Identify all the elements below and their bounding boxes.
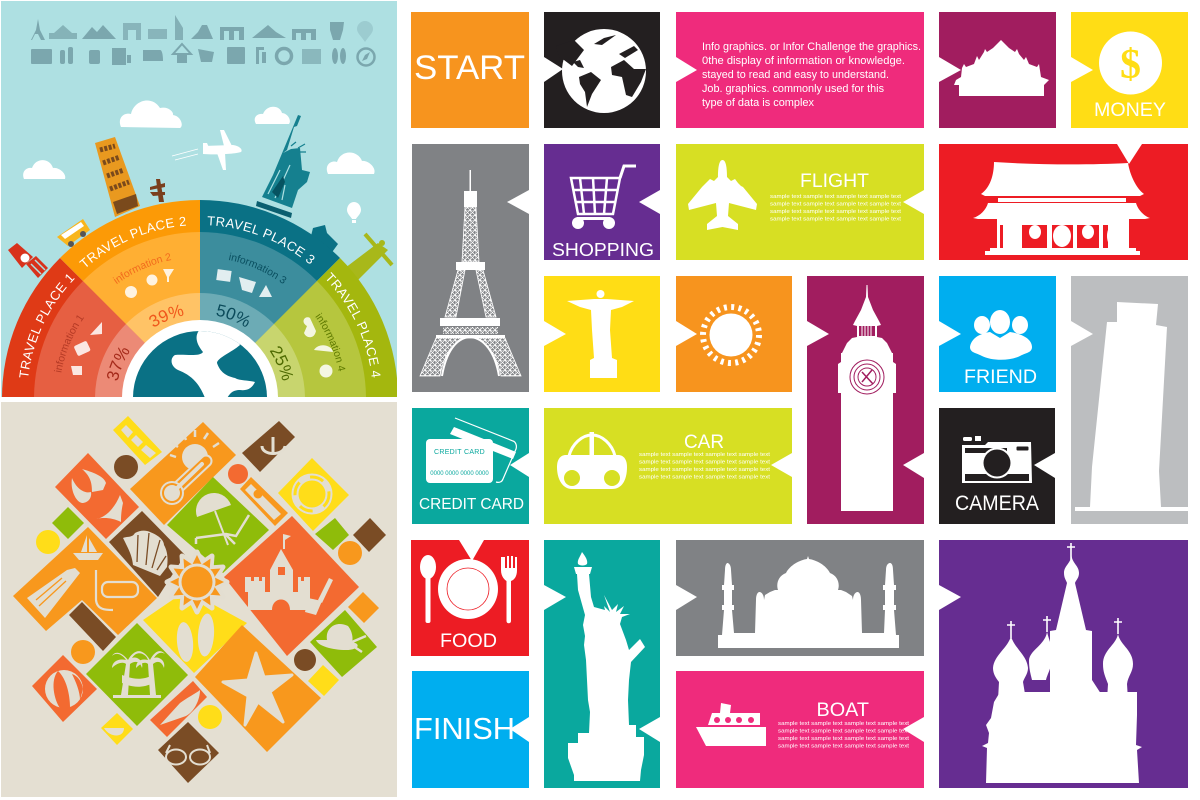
- tile: sandcastle: [224, 516, 359, 656]
- tile: credit card: CREDIT CARD: [419, 496, 524, 513]
- tile: flight: sample text sample text sample text sample text: [770, 209, 901, 215]
- sector percentages: 50%: [216, 304, 250, 327]
- tile: credit card: 0000 0000 0000 0000: [430, 471, 489, 477]
- tile: brown diamond: [353, 518, 386, 552]
- circle: yellow left: [36, 530, 60, 554]
- panel: travel places semicircle infographic: [1, 1, 397, 397]
- hot air balloon: [347, 202, 361, 223]
- tile: big ben: [807, 276, 924, 524]
- tile: sun: [676, 276, 792, 392]
- tile: intro text: [676, 12, 924, 128]
- tile: chinese temple: [939, 144, 1188, 260]
- tile: boat: sample text sample text sample text sample text: [778, 721, 909, 727]
- tile: flip flops: [143, 590, 247, 673]
- circle: brown right: [294, 649, 316, 671]
- Pisa tower: [95, 137, 140, 217]
- sector percentages: 37%: [107, 347, 130, 380]
- tile: intro text: Info graphics. or Infor Challenge the graphics.: [702, 41, 921, 53]
- tile: intro text: stayed to read and easy to understand.: [702, 69, 889, 81]
- sector percentages: [107, 304, 293, 380]
- tile: beach ball: [32, 655, 97, 722]
- tile: boat: sample text sample text sample text sample text: [778, 736, 909, 742]
- tile: finish: FINISH: [414, 711, 515, 746]
- sector titles: [19, 216, 380, 378]
- circle: orange right: [338, 541, 362, 565]
- tile: brown bar: [69, 602, 116, 651]
- tile: intro text: Job. graphics. commonly used for this: [702, 83, 884, 95]
- tile: statue of liberty: [544, 540, 660, 788]
- tile: boat: sample text sample text sample text sample text: [778, 728, 909, 734]
- clock tower: [8, 243, 48, 278]
- sector titles: TRAVEL PLACE 4: [326, 272, 380, 378]
- sector mini icons: [71, 269, 333, 378]
- tile: ice cream: [150, 681, 207, 737]
- tile: flight: [676, 144, 924, 260]
- tile: intro text: 0the display of information or knowledge.: [702, 55, 905, 67]
- circle: red: [228, 464, 248, 484]
- sector information labels: information 2: [112, 253, 172, 284]
- tile: start: START: [414, 49, 525, 87]
- tile: car: sample text sample text sample text sample text: [639, 474, 770, 480]
- christ statue: [345, 234, 392, 280]
- tile: christ the redeemer: [544, 276, 660, 392]
- sector information labels: information 1: [54, 316, 84, 372]
- tile: camera: CAMERA: [955, 492, 1039, 515]
- tile: lemon slice: [101, 713, 133, 745]
- tile: green small left: [52, 507, 84, 539]
- panel: beach icon collage: [1, 402, 397, 797]
- semicircle sectors: [2, 200, 398, 398]
- tile: sunglasses: [158, 722, 219, 783]
- icon row: landmarks: [31, 15, 373, 42]
- tile: boat: BOAT: [816, 699, 869, 721]
- tile: friend: FRIEND: [964, 366, 1037, 388]
- sector titles: TRAVEL PLACE 3: [208, 216, 314, 264]
- circle: brown: [114, 455, 138, 479]
- clouds: [23, 100, 375, 179]
- tile: flight: FLIGHT: [800, 170, 869, 192]
- bus: [57, 219, 90, 247]
- tile: car: [544, 408, 792, 524]
- tile: beach umbrella and lounger: [167, 477, 269, 573]
- tile: palms and hammock: [86, 623, 188, 726]
- plane and contrail: [172, 130, 242, 170]
- tile: anchor: [242, 421, 295, 472]
- tile: flight: sample text sample text sample text sample text: [770, 202, 901, 208]
- tile: money: MONEY: [1094, 99, 1166, 121]
- tile: shopping: SHOPPING: [552, 239, 654, 260]
- tile: money: $: [1120, 42, 1141, 88]
- circle: orange bottom left: [71, 640, 95, 664]
- tile: money: [1071, 12, 1188, 128]
- tile: boat: [676, 671, 924, 788]
- statue of liberty: [256, 115, 310, 218]
- sector information labels: information 4: [316, 312, 346, 372]
- sector titles: TRAVEL PLACE 1: [19, 274, 75, 378]
- tile: car: sample text sample text sample text sample text: [639, 460, 770, 466]
- tile: globe: [544, 12, 660, 128]
- sector titles: TRAVEL PLACE 2: [79, 216, 186, 267]
- tile: green small right: [315, 518, 349, 550]
- signpost: [150, 179, 165, 202]
- sector information labels: information 3: [229, 252, 286, 284]
- tile: thai temple: [939, 12, 1056, 128]
- globe: [122, 320, 278, 397]
- tile: life ring: [278, 458, 349, 531]
- tile: intro text: type of data is complex: [702, 97, 814, 109]
- ship silhouette: [311, 225, 338, 252]
- tile: bikini: [55, 453, 139, 539]
- tile: finish: [412, 671, 529, 788]
- icon row: travel items: [31, 44, 374, 66]
- tile: sun hat: [310, 610, 377, 677]
- tile: flight: sample text sample text sample text sample text: [770, 194, 901, 200]
- tile: taj mahal: [676, 540, 924, 656]
- tile: starfish: [195, 625, 321, 752]
- tile: sun: [167, 552, 227, 612]
- sector information labels: [54, 252, 346, 372]
- tile: boat: sample text sample text sample text sample text: [778, 744, 909, 750]
- tile: shopping: [544, 144, 660, 260]
- tile: st basil cathedral: [939, 540, 1188, 788]
- tile: eiffel tower: [412, 144, 529, 392]
- tile: camera: [939, 408, 1055, 524]
- circle: yellow bottom: [198, 705, 222, 729]
- tile: beach hut: [113, 416, 162, 465]
- sector percentages: 39%: [149, 304, 184, 326]
- tile: credit card: [412, 408, 529, 524]
- tile: flight: sample text sample text sample text sample text: [770, 216, 901, 222]
- tile: food: [411, 540, 529, 656]
- tile: start: [411, 12, 529, 128]
- tile: car: sample text sample text sample text sample text: [639, 452, 770, 458]
- tile: food: FOOD: [440, 630, 497, 652]
- tile: sunscreen: [240, 477, 288, 526]
- tile: yellow small right: [308, 665, 339, 696]
- tile: shell: [109, 511, 185, 597]
- sector percentages: 25%: [270, 346, 293, 380]
- tile: car: CAR: [684, 431, 724, 453]
- tile: car: sample text sample text sample text sample text: [639, 467, 770, 473]
- tile: friend: [939, 276, 1056, 392]
- tile: snorkel gear: [13, 527, 157, 635]
- tile: orange small diamond: [348, 592, 379, 623]
- tile: thermometer and sun: [130, 422, 236, 525]
- tile: pisa tower: [1071, 276, 1188, 524]
- tile: credit card: CREDIT CARD: [434, 449, 485, 456]
